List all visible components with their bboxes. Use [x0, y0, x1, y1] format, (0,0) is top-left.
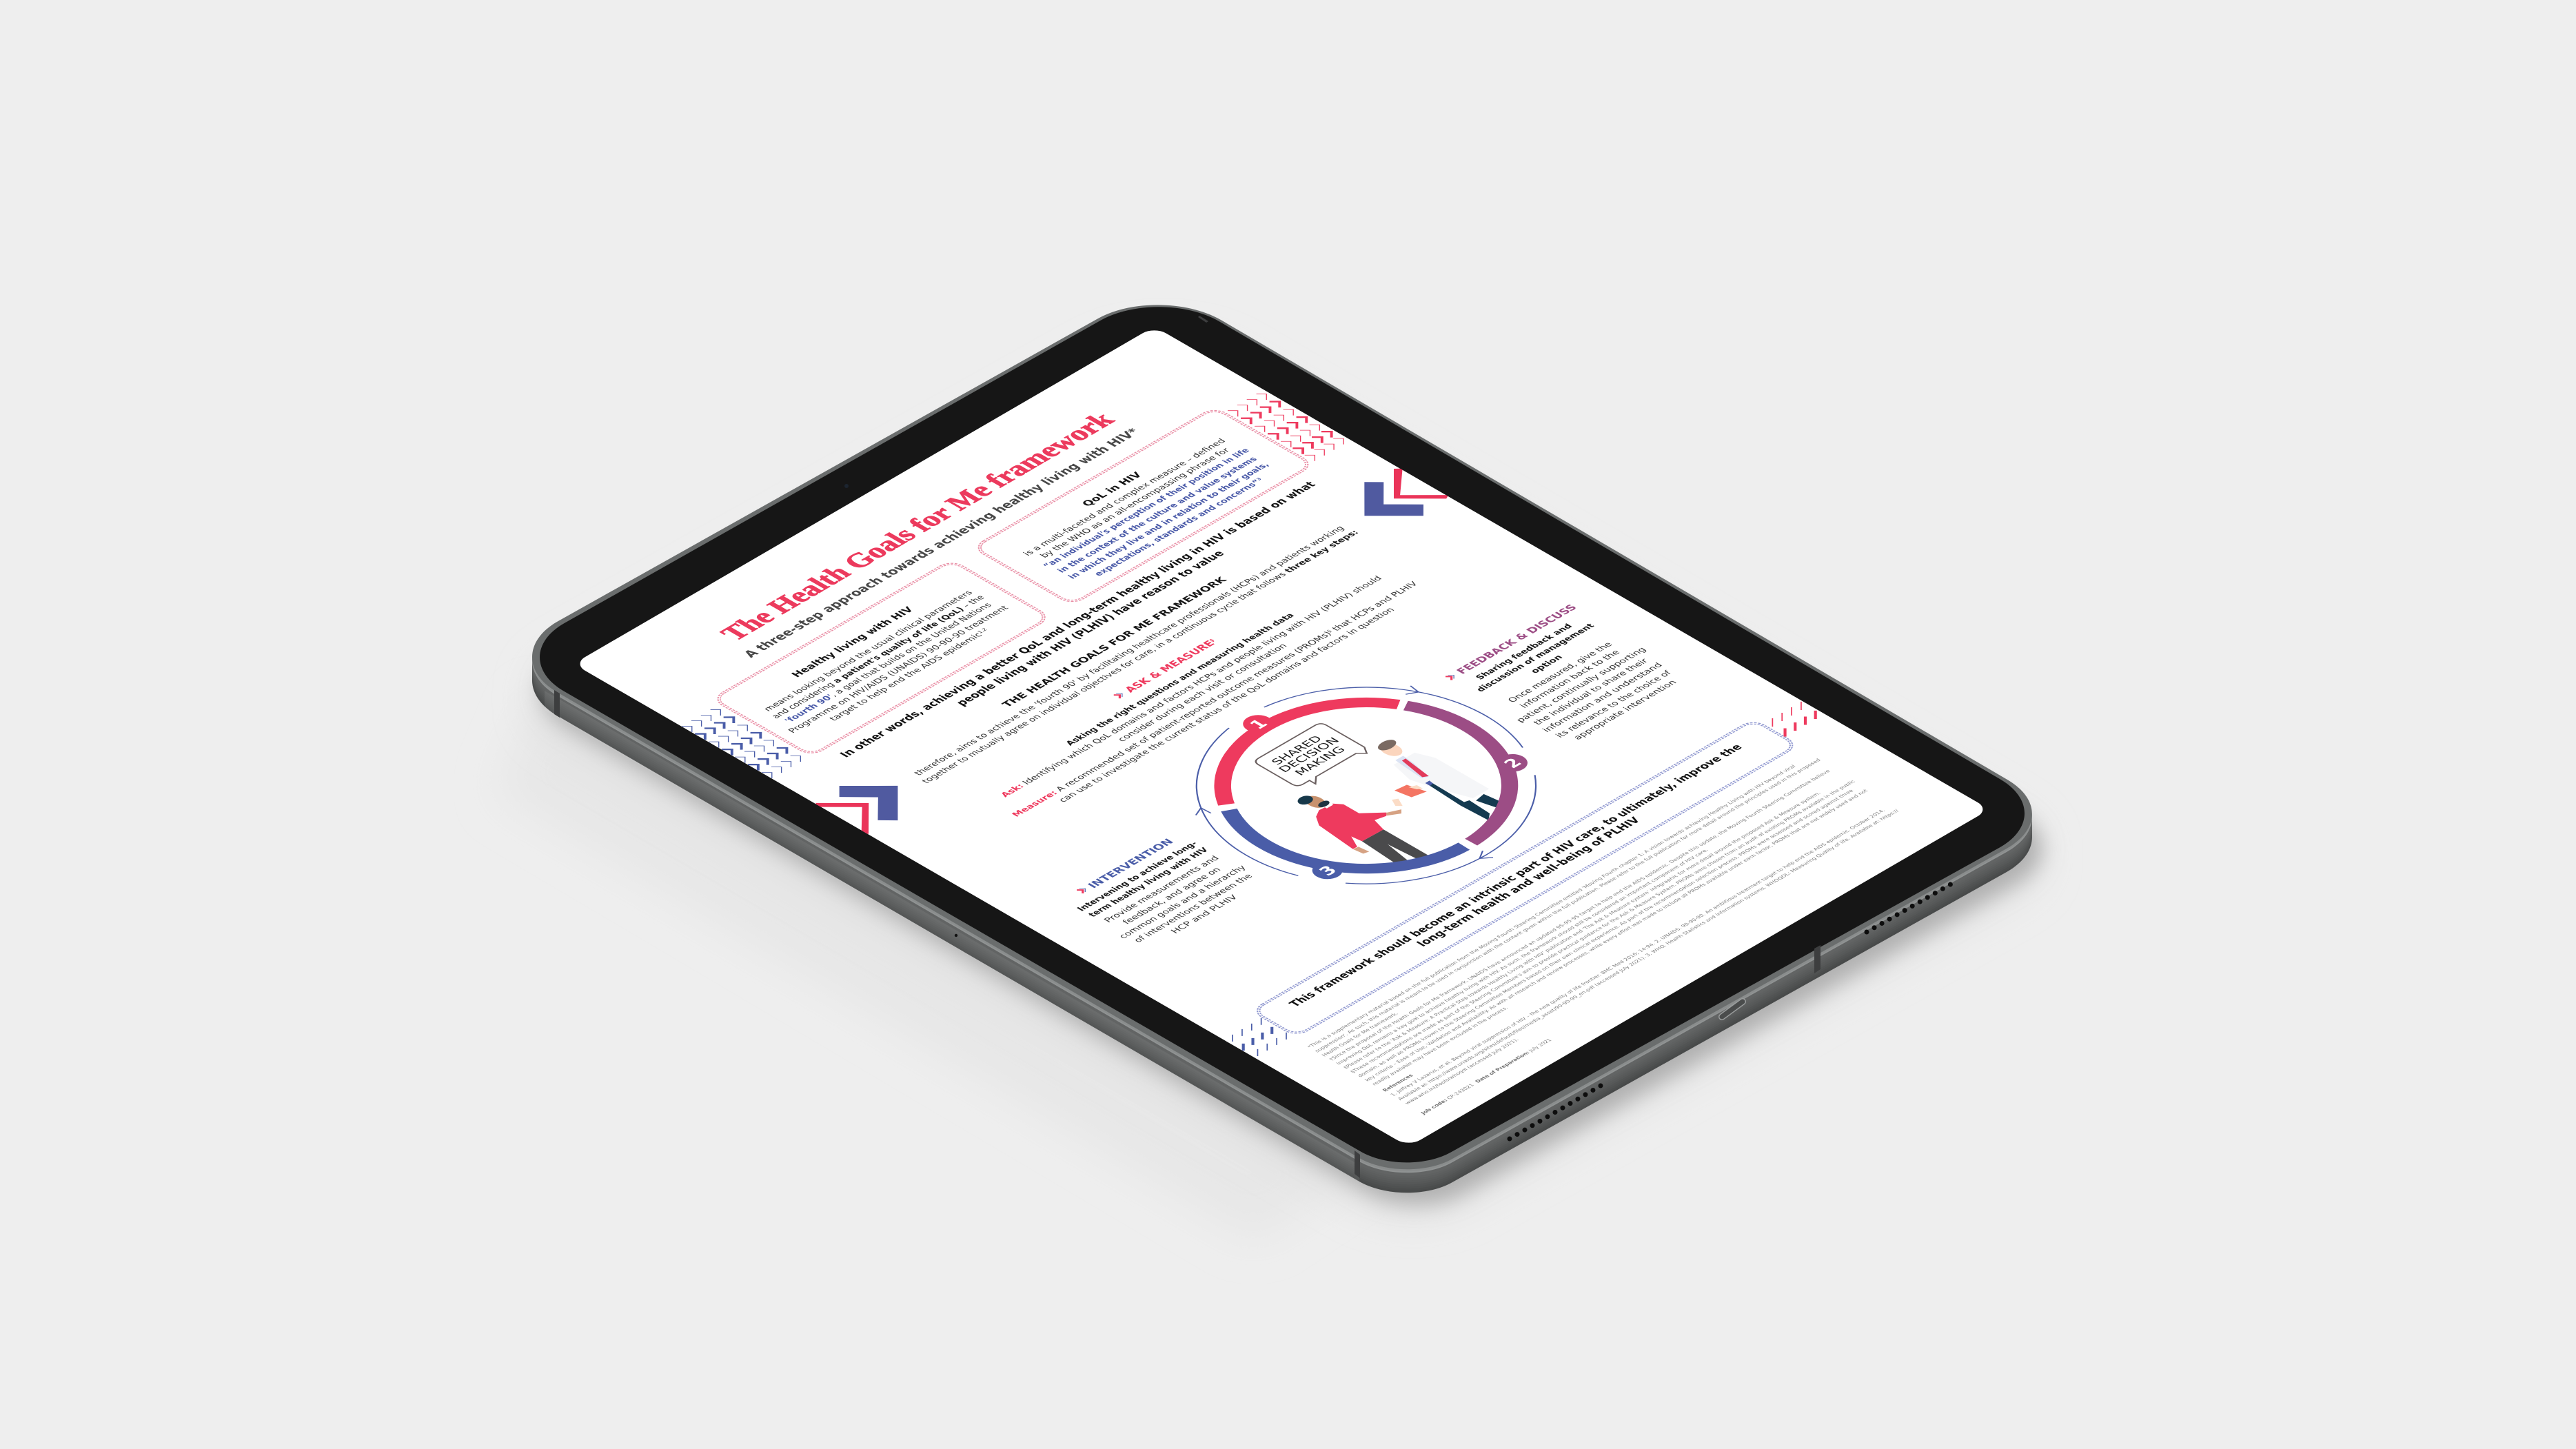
heading: healthy living: Healthy living with HIV: [789, 605, 917, 679]
body text: healthy living: and considering a patient's quality of life (QoL) – the: [769, 594, 987, 720]
footnotes: Health Goals for Me framework.: [1320, 1011, 1399, 1057]
body text: QoL definition: in the context of the culture and value systems: [1055, 455, 1259, 574]
speech bubble: shared decision making: DECISION: [1275, 736, 1342, 774]
footnotes: suppression'. As such, this material is meant to be used in conjunction with the content given within the full publication. Please refer to the full publication for more detail around the principles used in this proposed: [1313, 758, 1823, 1053]
decorative chevron pattern: pink: [1228, 391, 1348, 461]
camera dot: [844, 484, 849, 488]
body text: intervention: feedback, and agree on: [1119, 866, 1223, 926]
panel: QoL in HIV: [973, 407, 1313, 605]
antenna bands: [554, 316, 1821, 1178]
speaker holes: left group: [1510, 1086, 1601, 1139]
body text: feedback: the individual to share their: [1531, 657, 1651, 726]
body text: ask and measure: that HCPs and PLHIV: [1327, 580, 1420, 634]
body text: ask and measure: [986, 567, 1431, 824]
body text: QoL definition: 3: [1255, 477, 1263, 481]
ring segment 3: [1217, 760, 1464, 903]
references: www.who.int/tools/whoqol (accessed July 2021).: [1403, 1037, 1520, 1105]
footnotes: readily available may have been excluded in the process.: [1370, 1006, 1510, 1086]
framework introduction text: together to mutually agree on individual objectives for care, in a continuous cycle that follows three key steps:: [920, 528, 1361, 784]
speech bubble: shared decision making: SHARED: [1268, 733, 1325, 767]
subheading: feedback: Sharing feedback and: [1473, 622, 1574, 681]
heading: QoL in HIV: QoL in HIV: [1079, 470, 1145, 508]
heading: feedback: FEEDBACK & DISCUSS: [1454, 602, 1580, 676]
tablet body side: [532, 305, 2032, 1193]
body text: ask and measure: consider during each visit or consultation: [1115, 642, 1289, 743]
speech bubble: shared decision making: MAKING: [1292, 744, 1348, 778]
heading: ask and measure: ‡: [1208, 638, 1216, 642]
body text: QoL definition: expectations, standards and concerns”: [1092, 476, 1266, 578]
subheading: ask and measure: Asking the right questions and measuring health data: [1063, 611, 1297, 747]
body text: healthy living: Programme on HIV/AIDS (UNAIDS) 90-90-90 treatment: [786, 604, 1011, 734]
key statement: people living with HIV (PLHIV) have reason to value: [953, 549, 1227, 707]
body text: ask and measure: Measure: A recommended set of patient-reported outcome measures (PROMs): [1009, 639, 1319, 818]
body text: QoL definition: “an individual's perception of their position in life: [1040, 447, 1252, 569]
subheading: intervention: term healthy living with HIV: [1086, 846, 1210, 918]
badge 2: 2: [1500, 756, 1526, 771]
body text: feedback: information back to the: [1517, 648, 1623, 709]
step 3: intervention: [1057, 829, 1270, 953]
body text: feedback: appropriate intervention: [1571, 678, 1679, 741]
big chevrons right: [1364, 469, 1448, 516]
footnotes: ‡Please refer to the 'Ask & Measure: A Practical Step towards Healthy Living with HIV' publication and 'The Ask & Measure system' infographic for more detail around the proposed Ask & Measure system.: [1342, 791, 1822, 1070]
badge 1: [1237, 711, 1279, 736]
body text: intervention: common goals and a hierarchy: [1116, 863, 1248, 940]
body text: feedback: [1492, 633, 1692, 749]
subheading: feedback: discussion of management: [1474, 622, 1596, 693]
step 1: ask and measure: [958, 550, 1431, 824]
decorative dashes: blue: [1224, 1018, 1292, 1057]
body text: QoL definition: is a multi-faceted and complex measure – defined: [1021, 437, 1228, 557]
section heading: framework: THE HEALTH GOALS FOR ME FRAMEWORK: [1000, 575, 1230, 709]
job code and date: Date of Preparation: July 2021: [1474, 1037, 1553, 1084]
body text: feedback: Once measured, give the: [1505, 640, 1614, 704]
tablet screen: infographic page: [570, 325, 1991, 1148]
subheading: feedback: option: [1528, 653, 1565, 675]
footnotes: §These recommendations are made as part of the Steering Committee's aim to provide practical guidance for the Ask & Measure System. PROMs were chosen from an audit of existing PROMs available in the public: [1349, 779, 1856, 1074]
footnotes: *This is a supplementary material based on the full publication from the Moving Fourth Steering Committee entitled 'Moving Fourth chapter 1: A vision towards achieving Healthy Living with HIV beyond viral: [1306, 764, 1797, 1049]
footnotes: domain, as well as PROMs known to the Steering Committee Members based on their own clinical experience. As part of the recommendation selection process, PROMs were assessed and scored against three: [1356, 788, 1855, 1078]
references: 1. Jeffrey V Lazarus, et al. Beyond viral suppression of HIV – the new quality of life frontier. BMC Med 2016; 14:94. 2. UNAIDS. 90-90-90. An ambitious treatment target to help end the AIDS epidemic. October 2014.: [1389, 808, 1887, 1097]
body text: healthy living: 'fourth 90', a goal that builds on the United Nations: [782, 601, 994, 724]
badge 3: 3: [1315, 863, 1341, 878]
big chevrons left: [816, 786, 897, 834]
patient figure: [1282, 774, 1457, 875]
body text: healthy living: 1,2: [977, 627, 988, 634]
body text: ask and measure: can use to investigate the current status of the QoL domains and factors in question: [1056, 606, 1397, 804]
badge 3: [1306, 858, 1349, 883]
body text: healthy living: target to help end the AIDS epidemic: [826, 636, 975, 722]
job code and date: [1419, 1037, 1553, 1115]
icon: chevron step 3: [1077, 887, 1088, 893]
decorative dashes: pink: [1763, 702, 1823, 737]
key statement: In other words, achieving a better QoL and long-term healthy living in HIV is based on what: [837, 480, 1319, 759]
icon: chevron step 1: [1114, 692, 1125, 698]
speaker holes: right group: [1867, 880, 1958, 932]
footnotes: key criteria – Ease of Use, Validation and Availability. As with all research and review processes, while every effort was made to include all PROMs available under each factor, PROMs that are not widely used and not: [1363, 789, 1869, 1082]
panel: closing statement: long-term health and well-being of PLHIV: [1414, 815, 1643, 949]
job code and date: Job code: CP-243021: [1419, 1083, 1476, 1115]
step 2: feedback and discuss: [1441, 602, 1694, 749]
framework introduction text: therefore, aims to achieve the 'fourth 90' by facilitating healthcare professionals (HCPs) and patients working: [911, 524, 1346, 777]
heading: intervention: INTERVENTION: [1085, 837, 1177, 890]
ring segment 1: [1179, 677, 1399, 804]
panel: healthy living with HIV: [713, 560, 1050, 756]
speech bubble: shared decision making: [1252, 722, 1372, 791]
badge 1: 1: [1246, 716, 1272, 732]
body text: feedback: patient, continually supporting: [1514, 645, 1648, 724]
doctor figure: [1334, 735, 1516, 840]
icon: chevron step 2: [1446, 673, 1457, 680]
decorative chevron pattern: blue: [682, 707, 806, 778]
footnotes: †Since the proposal of the Health Goals for Me framework, UNAIDS have announced an updated 95-95-95 target to help end the AIDS epidemic. Despite this update, the Moving Fourth Steering Committee believe: [1328, 769, 1832, 1062]
body text: QoL definition: by the WHO as an all-encompassing phrase for: [1037, 446, 1233, 559]
subtitle: A three-step approach towards achieving healthy living with HIV*: [741, 426, 1143, 660]
body text: ask and measure: Ask: Identifying which QoL domains and factors HCPs and people living with HIV (PLHIV) should: [998, 574, 1384, 798]
subheading: intervention: Intervening to achieve long-: [1075, 840, 1199, 913]
body text: healthy living: means looking beyond the usual clinical parameters: [761, 589, 975, 713]
body text: feedback: its relevance to the choice of: [1553, 669, 1674, 739]
outer cycle arrows: [1128, 647, 1612, 928]
heading: ask and measure: ASK & MEASURE: [1122, 638, 1219, 694]
side microphone dot: [955, 934, 957, 937]
ring segment 2: [1321, 698, 1569, 842]
usb-c port: [1722, 1002, 1743, 1017]
body text: ask and measure: §: [1326, 629, 1333, 634]
badge 2: [1491, 751, 1534, 776]
title: The Health Goals for Me framework: [713, 408, 1121, 645]
body text: QoL definition: in which they live and in relation to their goals,: [1066, 460, 1271, 580]
references: Available at: https://www.unaids.org/sites/default/files/media_asset/90-90-90_en.pdf (accessed July 2021). 3. WHO. Health Statistics and information systems. WHOQOL: Measuring Quality of life. Available at: https://: [1396, 808, 1900, 1101]
tablet black bezel: [540, 307, 2025, 1162]
body text: intervention: Provide measurements and: [1102, 854, 1221, 924]
panel: closing statement: This framework should become an intrinsic part of HIV care, to ultimately, improve the: [1286, 742, 1745, 1009]
cycle diagram: [1128, 647, 1612, 928]
body text: intervention: HCP and PLHIV: [1168, 893, 1240, 935]
body text: intervention: [1095, 851, 1270, 953]
footnotes: improving QoL remains a key goal to achieve healthy living with HIV. As such, the framework should still be considered an important component of HIV care.: [1335, 848, 1710, 1066]
body text: intervention: of interventions between the: [1131, 872, 1255, 944]
tablet shadow: [496, 339, 2042, 1241]
references: References: [1381, 1073, 1415, 1093]
body text: feedback: information and understand: [1540, 661, 1665, 733]
